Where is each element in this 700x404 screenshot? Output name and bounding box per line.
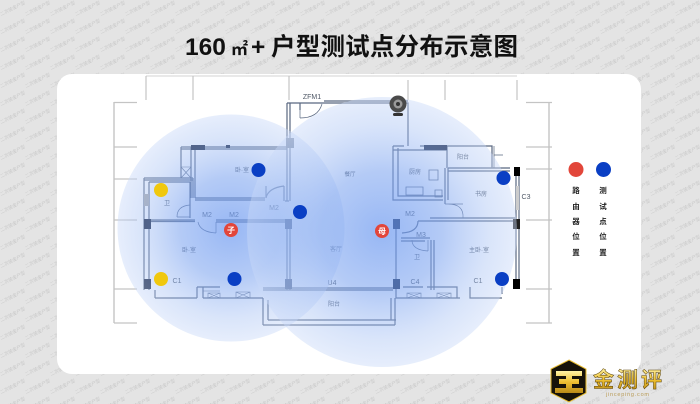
legend: test point position: 点 xyxy=(599,216,607,226)
room labels: 书房 xyxy=(475,190,487,198)
legend: test point position: 置 xyxy=(599,248,607,257)
room labels: M2 xyxy=(269,205,279,212)
room labels: ZFM1 xyxy=(303,94,321,101)
panel: floor plan card xyxy=(57,74,641,374)
legend: router position xyxy=(568,162,584,257)
room labels: 主卧·室 xyxy=(469,246,489,254)
room labels: 厨房 xyxy=(409,168,421,176)
signal coverage circles xyxy=(118,97,517,367)
legend: router position: 位 xyxy=(572,231,580,241)
room labels: 卧·室 xyxy=(235,166,249,174)
room labels: 阳台 xyxy=(457,153,469,161)
room labels: 卫 xyxy=(164,200,170,207)
logo xyxy=(551,360,662,402)
room labels: M2 xyxy=(202,212,212,219)
room labels: 卫 xyxy=(414,254,420,261)
icon: router camera xyxy=(390,96,406,116)
room labels: 阳台 xyxy=(328,300,340,308)
title xyxy=(185,32,518,61)
yellow test points xyxy=(154,183,168,286)
router: sub: 子 xyxy=(227,226,235,235)
room labels: C1 xyxy=(173,278,182,285)
room labels: U4 xyxy=(328,280,337,287)
room labels: C4 xyxy=(411,279,420,286)
floor plan walls xyxy=(144,101,519,325)
room labels xyxy=(164,94,531,308)
router: main: 母 xyxy=(378,227,386,236)
room labels: 客厅 xyxy=(330,245,342,253)
logo url: jinceping.com xyxy=(605,392,649,398)
logo wordmark: 金测评 xyxy=(593,368,662,392)
room labels: M2 xyxy=(229,212,239,219)
icon: gold shield xyxy=(551,360,586,402)
title: 户型测试点分布示意图 xyxy=(271,32,518,61)
legend: test point position: 试 xyxy=(599,202,607,211)
legend: router position: 由 xyxy=(572,201,580,211)
legend: router position: 路 xyxy=(572,185,580,195)
router: main xyxy=(375,224,389,238)
dimension lines xyxy=(114,76,552,323)
legend: test point position: 位 xyxy=(599,231,607,241)
title: ㎡ xyxy=(231,40,248,59)
blue test points xyxy=(228,163,510,286)
wall columns xyxy=(144,138,520,289)
title: + xyxy=(251,34,265,61)
room labels: C3 xyxy=(522,194,531,201)
router: sub xyxy=(224,223,238,237)
title: 160 xyxy=(185,34,226,61)
room labels: M3 xyxy=(416,232,426,239)
legend: router position: 器 xyxy=(572,217,580,226)
legend: test point position xyxy=(596,162,611,257)
room labels: 卧·室 xyxy=(182,246,196,254)
room labels: M2 xyxy=(405,211,415,218)
room labels: C1 xyxy=(474,278,483,285)
legend: test point position: 测 xyxy=(599,185,607,195)
legend: router position: 置 xyxy=(572,248,580,257)
room labels: 餐厅 xyxy=(344,170,356,178)
